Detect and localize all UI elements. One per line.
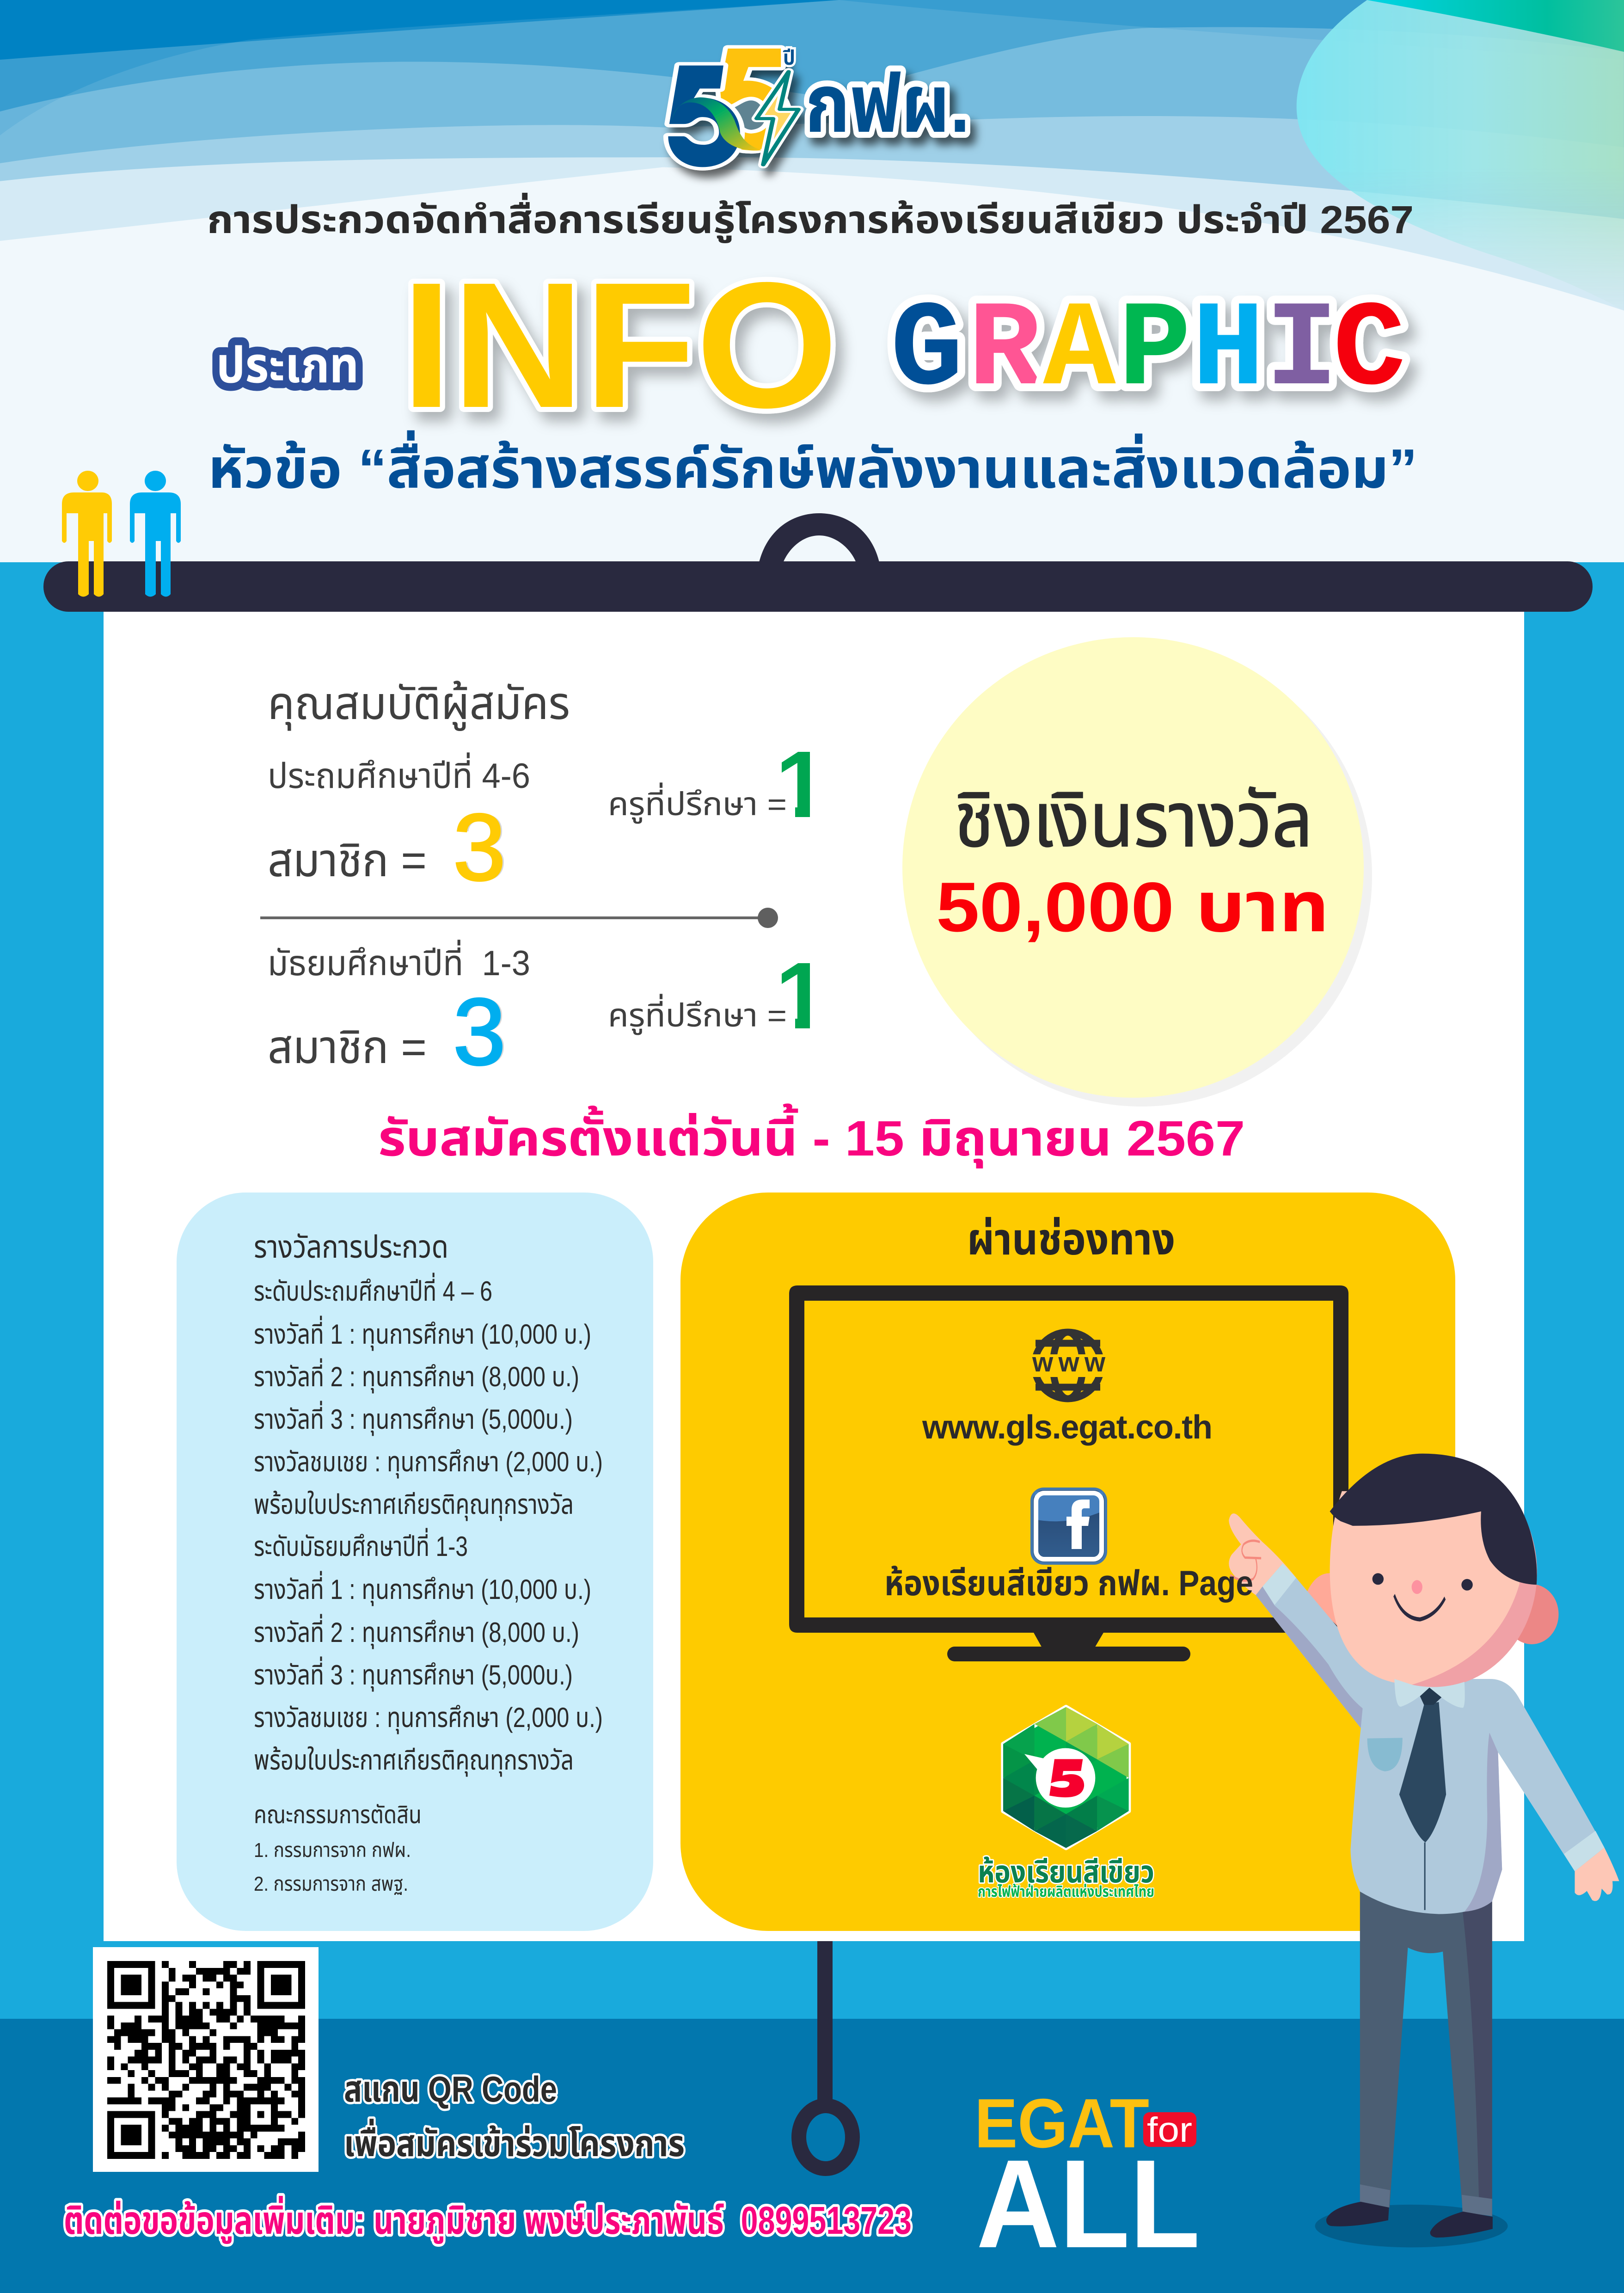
logo: EGAT for ALL: [974, 2084, 1200, 2274]
primary level group: สมาชิก =: [268, 835, 427, 886]
prizes list: พร้อมใบประกาศเกียรติคุณทุกรางวัล: [254, 1745, 574, 1777]
prizes list: ระดับประถมศึกษาปีที่ 4 – 6: [254, 1273, 492, 1307]
QR instructions: [344, 2069, 685, 2164]
prizes list: รางวัลชมเชย : ทุนการศึกษา (2,000 บ.): [254, 1702, 603, 1734]
prize circle: [902, 637, 1372, 1107]
trousers: [1360, 1890, 1492, 2216]
logo: green classroom: [978, 1707, 1154, 1900]
eligibility heading: คุณสมบัติผู้สมัคร: [268, 678, 570, 731]
projector screen: [104, 612, 1524, 1941]
secondary level group: 1: [775, 943, 828, 1049]
yellow numeral five: [720, 49, 788, 150]
hands: [1229, 1513, 1619, 1901]
divider line with dot: [260, 908, 778, 928]
QR code: [93, 1947, 319, 2172]
judges: [254, 1801, 422, 1895]
primary level group: ครูที่ปรึกษา =: [608, 782, 787, 824]
prize amount: 50,000 บาท: [936, 868, 1329, 947]
icon: www globe: [1032, 1332, 1106, 1399]
icon: blue person: [130, 471, 181, 596]
floor shadow: [1315, 2205, 1508, 2247]
primary level group: 3: [453, 794, 506, 900]
collar and tie: [1394, 1679, 1465, 1910]
prize label: ชิงเงินรางวัล: [955, 777, 1313, 862]
prizes list: รางวัลที่ 3 : ทุนการศึกษา (5,000บ.): [254, 1401, 573, 1436]
pull-down pole and ring: [799, 1941, 852, 2169]
heading GRAPHIC: G: [890, 283, 963, 420]
sky header with waves: [0, 0, 1624, 562]
primary level group: [268, 732, 828, 900]
website url: www.gls.egat.co.th: [922, 1409, 1213, 1446]
QR instructions: เพื่อสมัครเข้าร่วมโครงการ: [344, 2119, 685, 2164]
panel: prizes: [177, 1193, 653, 1931]
ears: [1305, 1573, 1559, 1644]
shoes: [1326, 2202, 1493, 2238]
secondary level group: [270, 940, 810, 1066]
monitor: [789, 1285, 1348, 1661]
prizes list: ระดับมัธยมศึกษาปีที่ 1-3: [254, 1528, 468, 1562]
ribbon swirl: [672, 98, 762, 151]
projector rod: [43, 561, 1593, 612]
judges: 1. กรรมการจาก กฟผ.: [254, 1839, 411, 1862]
secondary level group: ครูที่ปรึกษา =: [608, 994, 787, 1035]
logo: 55 years EGAT: [668, 49, 970, 167]
primary level group: ประถมศึกษาปีที่ 4-6: [268, 752, 530, 796]
prizes list: รางวัลชมเชย : ทุนการศึกษา (2,000 บ.): [254, 1446, 603, 1479]
logo: green classroom: การไฟฟ้าฝ่ายผลิตแห่งประเทศไทย: [978, 1883, 1154, 1900]
icon: www globe: www: [1032, 1347, 1106, 1377]
prizes heading: รางวัลการประกวด: [254, 1229, 448, 1265]
heading GRAPHIC: H: [1192, 283, 1265, 420]
shirt: [1256, 1563, 1605, 1914]
prizes list: รางวัลที่ 2 : ทุนการศึกษา (8,000 บ.): [254, 1614, 579, 1649]
secondary level group: มัธยมศึกษาปีที่ 1-3: [268, 940, 530, 983]
secondary level group: 3: [455, 979, 508, 1085]
facebook page name: ห้องเรียนสีเขียว กฟผ. Page: [884, 1564, 1253, 1603]
prizes list: [254, 1273, 603, 1777]
icon: yellow person: [62, 471, 112, 596]
panel: eligibility: [260, 678, 828, 1085]
prizes list: รางวัลที่ 2 : ทุนการศึกษา (8,000 บ.): [254, 1358, 579, 1394]
heading INFO: INFO: [401, 246, 838, 445]
heading GRAPHIC: A: [1043, 283, 1117, 420]
blue numeral five: [668, 66, 740, 167]
icon: facebook: [1032, 1489, 1106, 1563]
logo: green classroom: ห้องเรียนสีเขียว: [978, 1855, 1154, 1889]
people icons: [62, 471, 181, 596]
channels heading: ผ่านช่องทาง: [967, 1215, 1175, 1264]
logo: EGAT for ALL: ALL: [976, 2133, 1200, 2274]
judges: 2. กรรมการจาก สพฐ.: [254, 1873, 408, 1895]
logo: EGAT for ALL: EGAT: [974, 2084, 1149, 2162]
logo year mark: ปี: [783, 47, 795, 69]
screen hanger: [758, 513, 880, 566]
heading GRAPHIC: I: [1265, 283, 1338, 420]
yellow five counter: [729, 98, 768, 132]
character: presenter pointing: [1229, 1454, 1619, 2247]
primary level group: 3: [455, 794, 508, 900]
judges: คณะกรรมการตัดสิน: [254, 1801, 422, 1829]
prizes list: รางวัลที่ 3 : ทุนการศึกษา (5,000บ.): [254, 1656, 573, 1692]
topic line: หัวข้อ “สื่อสร้างสรรค์รักษ์พลังงานและสิ่งแวดล้อม”: [208, 430, 1417, 500]
heading GRAPHIC: R: [968, 283, 1042, 420]
logo wordmark: กฟผ.: [805, 59, 970, 149]
contact information: ติดต่อขอข้อมูลเพิ่มเติม: นายภูมิชาย พงษ์ประภาพันธ์ 0899513723: [64, 2195, 912, 2244]
heading GRAPHIC: P: [1118, 283, 1191, 420]
category label: ประเภท: [216, 337, 359, 393]
primary level group: 1: [775, 732, 828, 837]
panel: channels: [680, 1193, 1455, 1931]
secondary level group: 3: [453, 979, 506, 1085]
prizes list: รางวัลที่ 1 : ทุนการศึกษา (10,000 บ.): [254, 1571, 591, 1606]
head: [1330, 1454, 1537, 1688]
secondary level group: สมาชิก =: [268, 1021, 427, 1073]
contest subtitle: การประกวดจัดทำสื่อการเรียนรู้โครงการห้องเรียนสีเขียว ประจำปี 2567: [207, 192, 1414, 243]
application deadline: รับสมัครตั้งแต่วันนี้ - 15 มิถุนายน 2567: [378, 1104, 1245, 1168]
prizes list: พร้อมใบประกาศเกียรติคุณทุกรางวัล: [254, 1489, 574, 1521]
heading GRAPHIC: [890, 283, 1406, 420]
lightning bolt: [757, 72, 798, 165]
logo: EGAT for ALL: for: [1147, 2110, 1192, 2150]
QR instructions: สแกน QR Code: [344, 2069, 557, 2109]
heading GRAPHIC: C: [1333, 283, 1406, 420]
prizes list: รางวัลที่ 1 : ทุนการศึกษา (10,000 บ.): [254, 1316, 591, 1351]
